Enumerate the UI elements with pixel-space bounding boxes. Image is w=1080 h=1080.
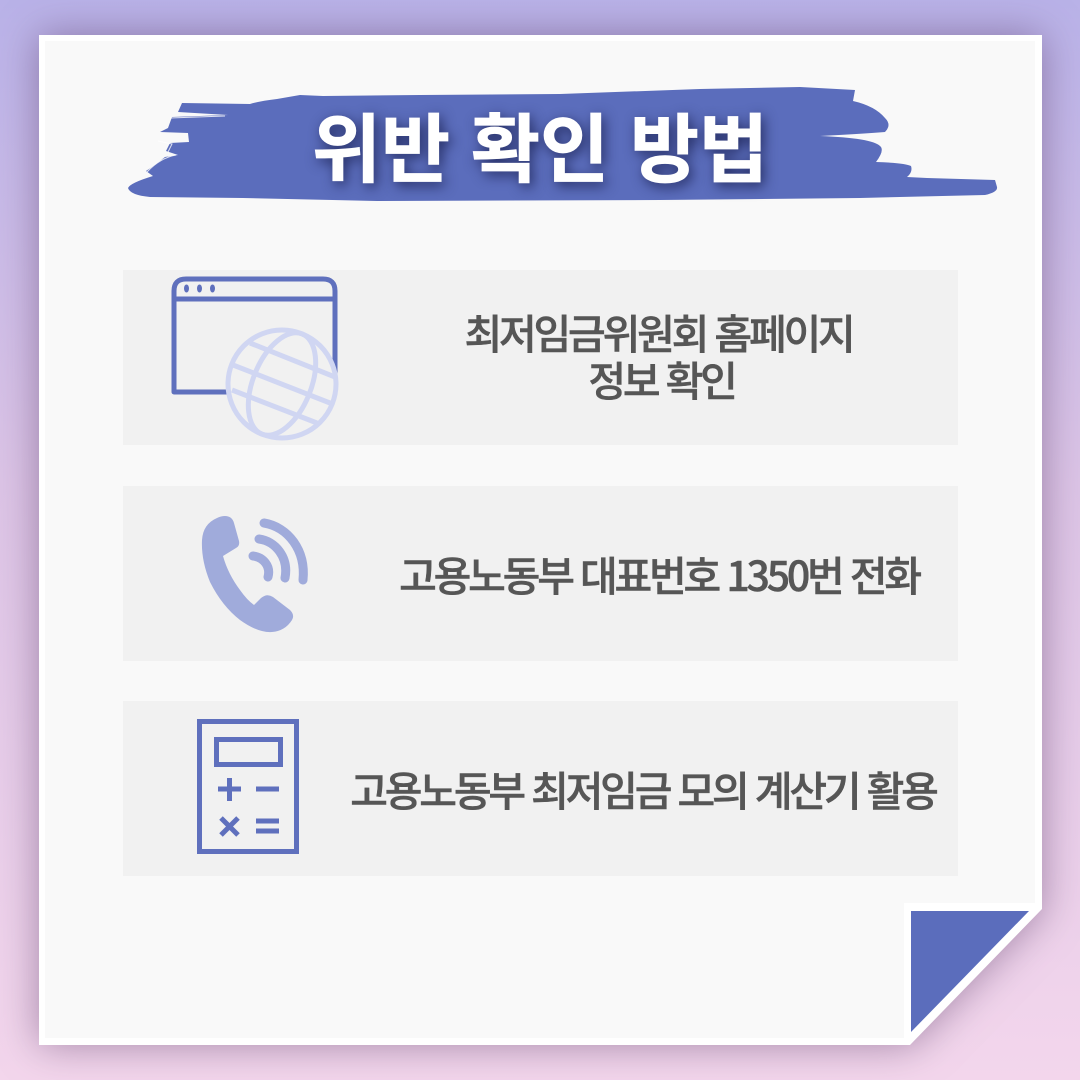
text: calculator: 고용노동부 최저임금 모의 계산기 활용 [350, 758, 936, 818]
panel: phone [123, 486, 958, 661]
text: homepage [464, 301, 852, 408]
text: phone: 고용노동부 대표번호 1350번 전화 [399, 543, 919, 603]
text: homepage: 최저임금위원회 홈페이지 [464, 301, 852, 361]
title: 위반 확인 방법 [312, 89, 768, 198]
panel: calculator [123, 701, 958, 876]
text: homepage: 정보 확인 [588, 348, 735, 408]
panel: homepage [123, 270, 958, 445]
